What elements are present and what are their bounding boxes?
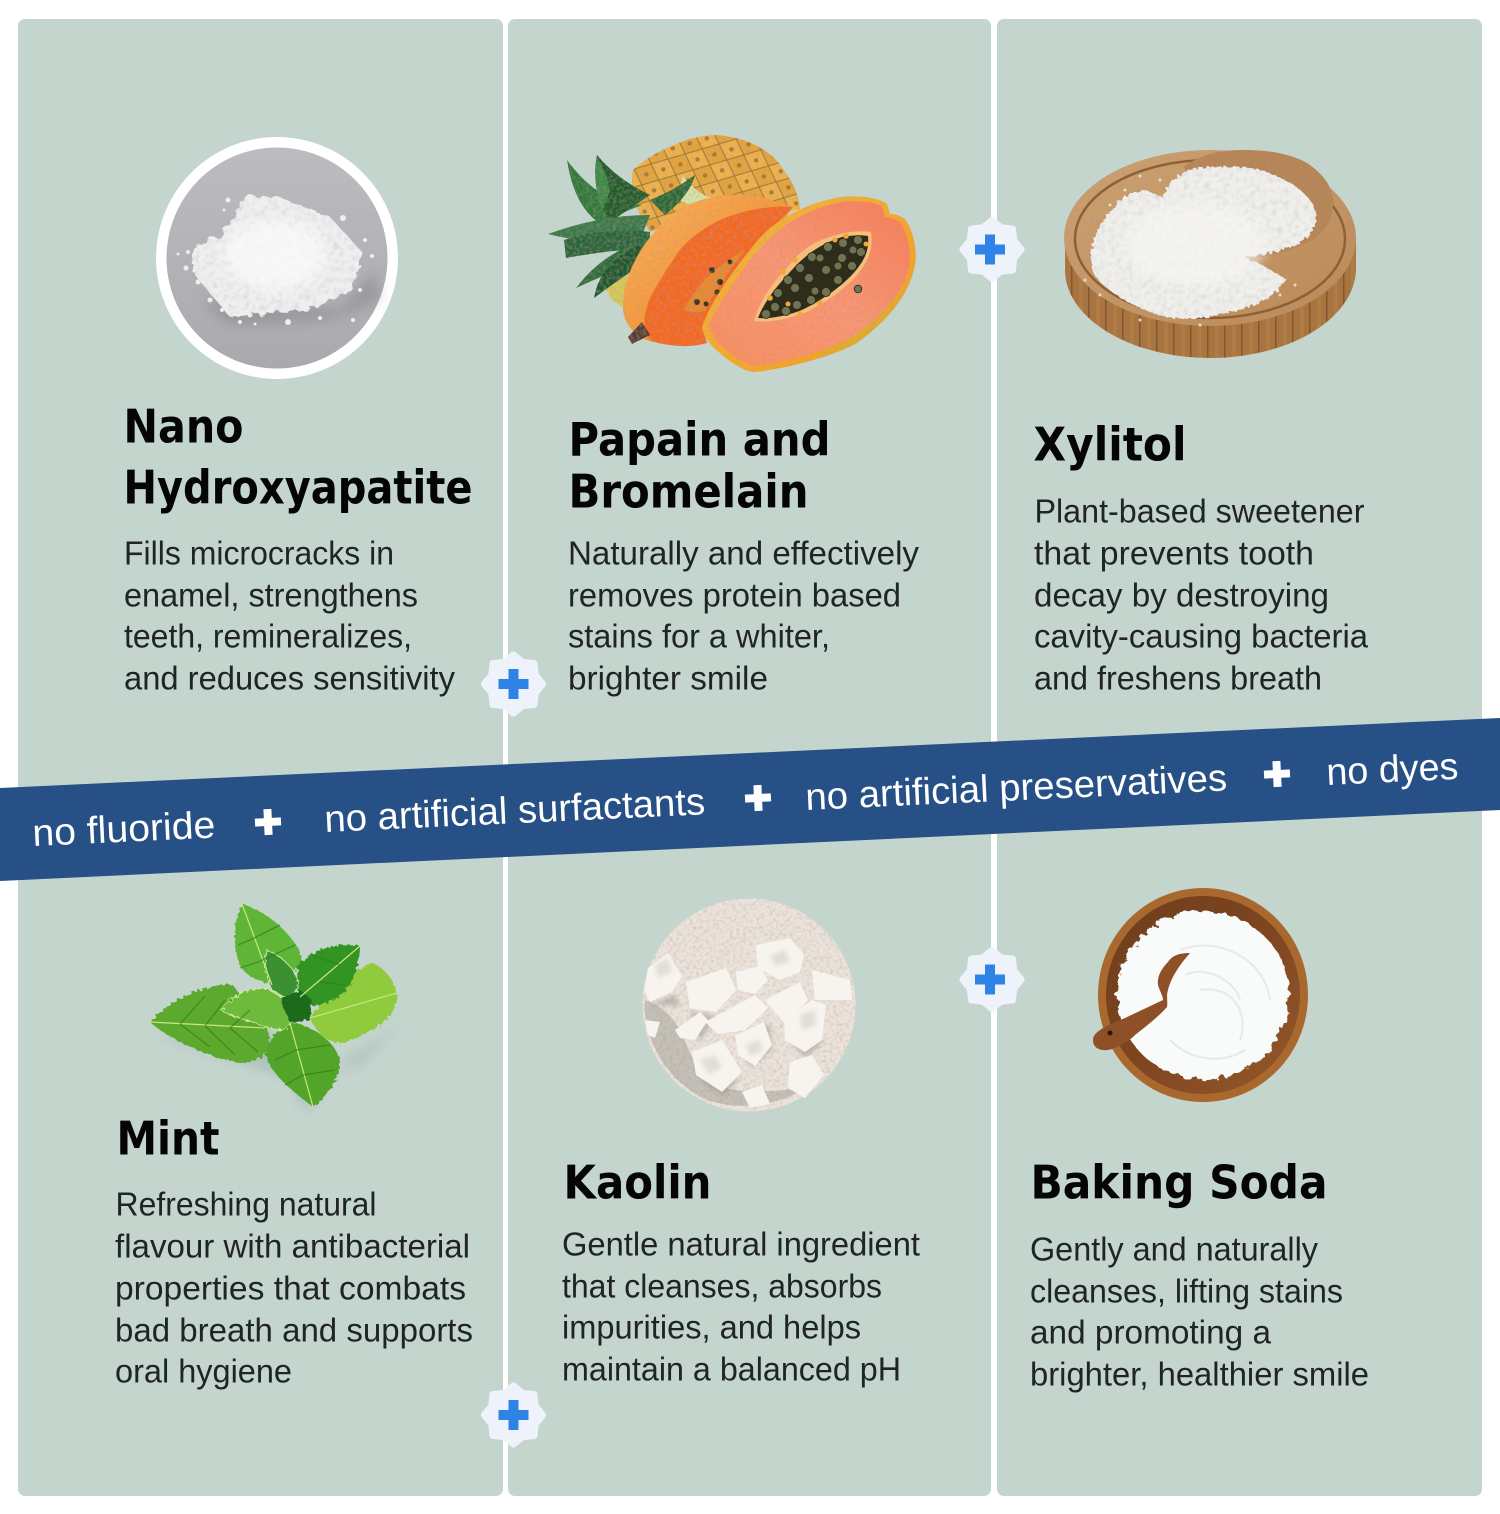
text: kaolin description: impurities, and helps — [562, 1309, 861, 1346]
text: papain and bromelain description: removes protein based — [568, 577, 901, 614]
pineapple body — [595, 135, 800, 312]
far right leaf — [310, 964, 397, 1043]
text: papain and bromelain description — [568, 535, 919, 697]
panel: nano hydroxyapatite — [18, 19, 503, 1496]
text: kaolin description: that cleanses, absorbs — [562, 1268, 882, 1305]
icon: xylitol on wooden board — [1064, 150, 1356, 358]
heading: papain and bromelain — [568, 412, 830, 518]
heading: papain and bromelain: Bromelain — [568, 464, 808, 518]
text: nano hydroxyapatite description: Fills microcracks in — [124, 535, 394, 572]
text: baking soda description: and promoting a — [1030, 1314, 1272, 1351]
text: baking soda description — [1030, 1231, 1369, 1393]
icon: nano hydroxyapatite powder — [156, 137, 398, 379]
banner: free-from claims: no artificial surfactants — [323, 781, 706, 841]
pineapple crown — [548, 155, 695, 298]
text: mint description: bad breath and supports — [115, 1312, 473, 1349]
panel: papain and bromelain — [508, 19, 991, 1496]
heading: nano hydroxyapatite — [124, 400, 472, 514]
text: baking soda description: brighter, healthier smile — [1030, 1356, 1369, 1393]
text: mint description: oral hygiene — [115, 1353, 292, 1390]
heading: baking soda: Baking Soda — [1030, 1156, 1328, 1210]
text: papain and bromelain description: brighter smile — [568, 660, 768, 697]
text: papain and bromelain description: Naturally and effectively — [568, 535, 919, 572]
text: xylitol description: that prevents tooth — [1034, 535, 1314, 572]
badge: plus bottom middle-left — [484, 1386, 542, 1444]
text: baking soda description: cleanses, lifting stains — [1030, 1273, 1343, 1310]
text: xylitol description: decay by destroying — [1034, 577, 1329, 614]
heading: nano hydroxyapatite: Nano — [124, 400, 244, 454]
text: mint description: flavour with antibacterial — [115, 1228, 470, 1265]
text: nano hydroxyapatite description: teeth, remineralizes, — [124, 618, 412, 655]
text: mint description — [115, 1186, 473, 1390]
badge: plus top middle-right — [963, 220, 1021, 278]
heading: xylitol: Xylitol — [1034, 418, 1186, 472]
centre light leaf — [221, 988, 300, 1030]
banner: free-from claims: no artificial preservatives — [804, 757, 1228, 819]
right dark leaf — [297, 945, 360, 1005]
banner: free-from claims — [0, 718, 1500, 881]
papaya left half — [623, 194, 793, 346]
text: xylitol description — [1034, 493, 1369, 697]
text: papain and bromelain description: stains for a whiter, — [568, 618, 830, 655]
text: kaolin description: maintain a balanced pH — [562, 1351, 901, 1388]
text: baking soda description: Gently and naturally — [1030, 1231, 1318, 1268]
text: nano hydroxyapatite description — [124, 535, 455, 697]
badge: plus top middle-left — [484, 655, 542, 713]
heading: kaolin: Kaolin — [564, 1156, 712, 1210]
top leaf — [235, 904, 302, 985]
text: mint description: Refreshing natural — [116, 1186, 376, 1223]
badge: plus bottom middle-right — [963, 950, 1021, 1008]
papaya right half — [702, 196, 916, 372]
text: xylitol description: Plant-based sweetener — [1034, 493, 1365, 530]
text: xylitol description: and freshens breath — [1034, 660, 1322, 697]
text: nano hydroxyapatite description: and reduces sensitivity — [124, 660, 455, 697]
icon: mint leaves — [150, 904, 400, 1112]
bottom leaf — [266, 1022, 340, 1107]
text: kaolin description: Gentle natural ingredient — [562, 1226, 920, 1263]
centre small leaves — [265, 950, 298, 1000]
text: xylitol description: cavity-causing bacteria — [1034, 618, 1369, 655]
panel: xylitol — [997, 19, 1482, 1496]
heading: papain and bromelain: Papain and — [568, 412, 830, 466]
banner: free-from claims: no fluoride — [31, 805, 216, 855]
icon: kaolin rocks — [642, 898, 856, 1112]
icon: baking soda bowl — [1093, 888, 1308, 1102]
banner: free-from claims: no dyes — [1325, 746, 1459, 794]
spoon — [1093, 953, 1190, 1050]
text: mint description: properties that combats — [115, 1270, 466, 1307]
icon: pineapple and papaya — [548, 135, 916, 372]
heading: mint: Mint — [116, 1112, 220, 1166]
heading: nano hydroxyapatite: Hydroxyapatite — [124, 460, 472, 514]
papaya seed cavity — [754, 231, 872, 322]
text: nano hydroxyapatite description: enamel, strengthens — [124, 577, 418, 614]
left leaf — [150, 984, 269, 1063]
text: kaolin description — [562, 1226, 920, 1388]
